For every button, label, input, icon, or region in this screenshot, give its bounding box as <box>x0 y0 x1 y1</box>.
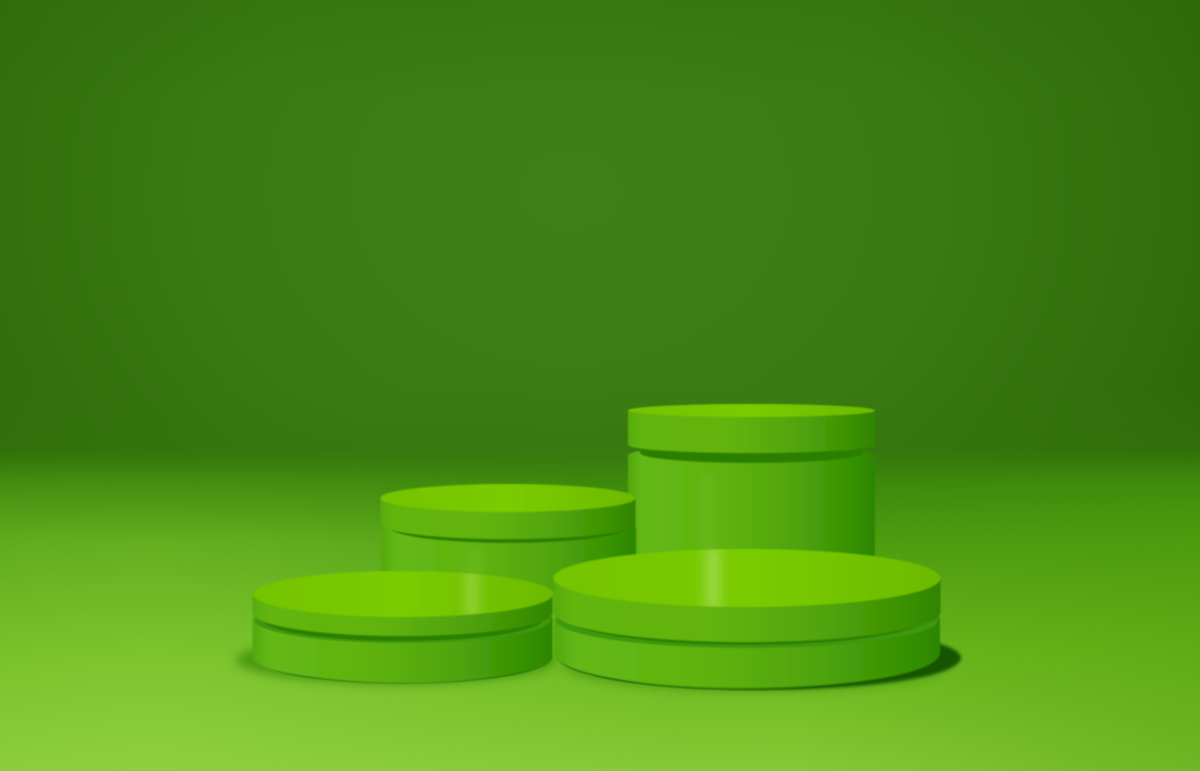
middle podium top disc <box>380 484 636 539</box>
podium: back tall <box>628 404 875 560</box>
left podium neck <box>262 610 543 641</box>
front podium lower ledge <box>556 592 938 648</box>
podium: left <box>252 568 553 684</box>
background wall <box>0 0 1200 480</box>
left podium highlight <box>466 568 478 620</box>
front podium neck <box>564 610 930 645</box>
middle podium neck <box>389 515 628 543</box>
back podium neck <box>640 440 863 463</box>
left podium lower ledge <box>254 597 550 643</box>
front podium top surface <box>554 549 940 607</box>
back podium reflection <box>704 475 712 557</box>
middle podium lower cylinder <box>381 514 636 592</box>
middle podium reflection <box>468 548 480 578</box>
shadows on floor <box>236 627 961 691</box>
left podium top surface <box>253 571 553 617</box>
middle podium top surface <box>380 484 636 512</box>
left podium contact line <box>254 654 552 684</box>
floor <box>0 448 1200 771</box>
podium: middle <box>380 484 636 592</box>
front podium contact line <box>555 651 939 690</box>
left podium top disc <box>252 571 552 636</box>
podium: front large <box>554 545 940 690</box>
front podium lower disc <box>554 592 940 688</box>
left podium lower disc <box>252 597 552 682</box>
front podium highlight <box>706 545 720 611</box>
front podium top disc <box>554 549 940 642</box>
back podium top surface <box>628 404 875 417</box>
back podium top disc <box>628 404 875 453</box>
back podium lower cylinder <box>628 446 875 560</box>
